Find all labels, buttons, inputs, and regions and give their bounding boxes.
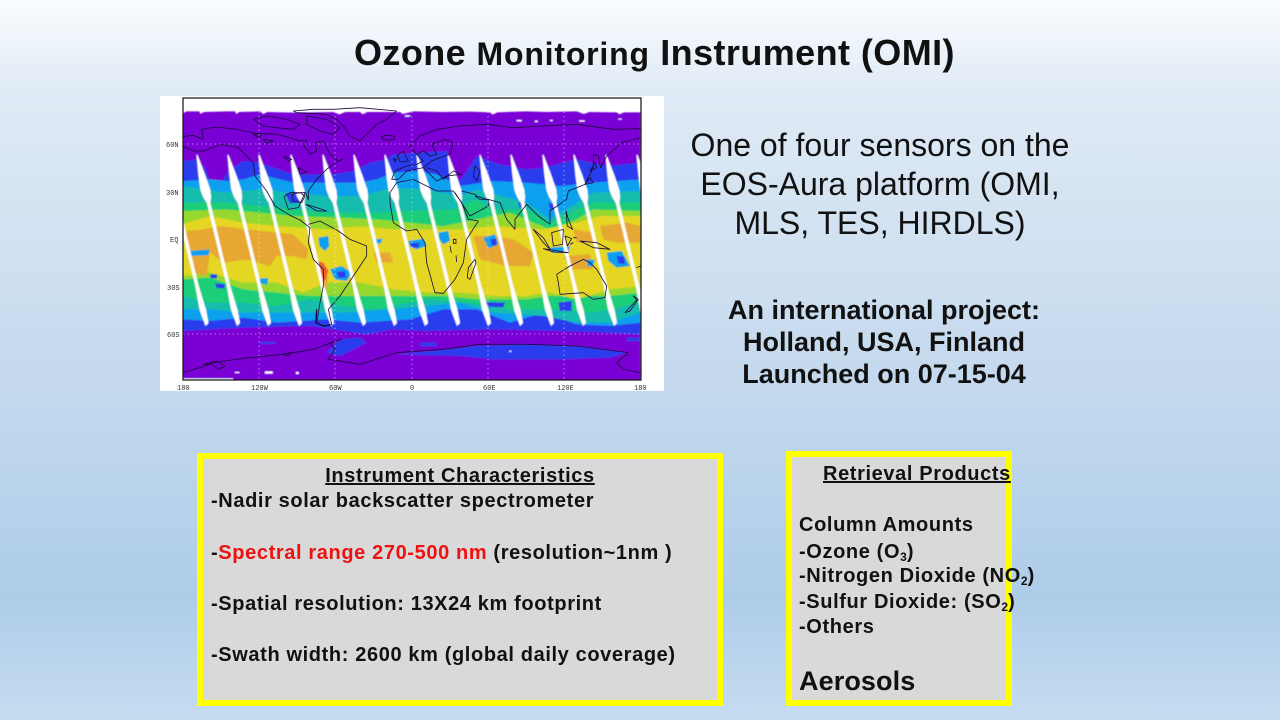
spectral range line: -Spectral range 270-500 nm (resolution~1nm )	[211, 542, 672, 564]
map axis labels	[166, 142, 647, 393]
project and launch note: Holland, USA, Finland	[743, 327, 1025, 357]
panel: retrieval products	[786, 451, 1012, 706]
aerosols label: Aerosols	[799, 666, 915, 696]
map axis labels: 60E	[483, 385, 496, 393]
sensors description: EOS-Aura platform (OMI,	[700, 166, 1060, 202]
column amounts list	[799, 514, 1035, 638]
sensors description	[691, 127, 1069, 241]
ozone colour bands	[183, 111, 641, 380]
project and launch note: An international project:	[728, 295, 1040, 325]
map axis labels: 120E	[557, 385, 574, 393]
column amounts list: -Nitrogen Dioxide (NO2)	[799, 565, 1035, 588]
map axis labels: 30S	[167, 285, 180, 293]
small ice gaps	[235, 115, 622, 374]
panel heading: Retrieval Products	[823, 463, 1011, 485]
map axis labels: EQ	[170, 237, 178, 245]
column amounts list: -Ozone (O3)	[799, 541, 914, 564]
swath gaps	[184, 154, 640, 380]
graticule	[183, 98, 641, 380]
antarctic blue patches	[397, 344, 627, 359]
spatial resolution line: -Spatial resolution: 13X24 km footprint	[211, 593, 602, 615]
satellite ozone map	[160, 96, 664, 391]
nadir line: -Nadir solar backscatter spectrometer	[211, 490, 594, 512]
ozone patches	[188, 231, 630, 284]
project and launch note	[728, 295, 1040, 389]
title: Ozone Monitoring Instrument (OMI)	[354, 32, 955, 73]
map axis labels: 180	[634, 385, 647, 393]
column amounts list: Column Amounts	[799, 514, 974, 536]
swath width line: -Swath width: 2600 km (global daily coverage)	[211, 644, 676, 666]
sensors description: MLS, TES, HIRDLS)	[734, 205, 1026, 241]
map axis labels: 180	[177, 385, 190, 393]
sensors description: One of four sensors on the	[691, 127, 1069, 163]
panel heading: Instrument Characteristics	[325, 465, 595, 487]
map axis labels: 0	[410, 385, 414, 393]
map axis labels: 60W	[329, 385, 342, 393]
map axis labels: 60S	[167, 332, 180, 340]
project and launch note: Launched on 07-15-04	[742, 359, 1026, 389]
map axis labels: 60N	[166, 142, 179, 150]
map axis labels: 30N	[166, 190, 179, 198]
column amounts list: -Others	[799, 616, 874, 638]
map axis labels: 120W	[251, 385, 269, 393]
panel: instrument characteristics	[197, 453, 723, 706]
coastlines	[183, 108, 641, 373]
column amounts list: -Sulfur Dioxide: (SO2)	[799, 591, 1015, 614]
